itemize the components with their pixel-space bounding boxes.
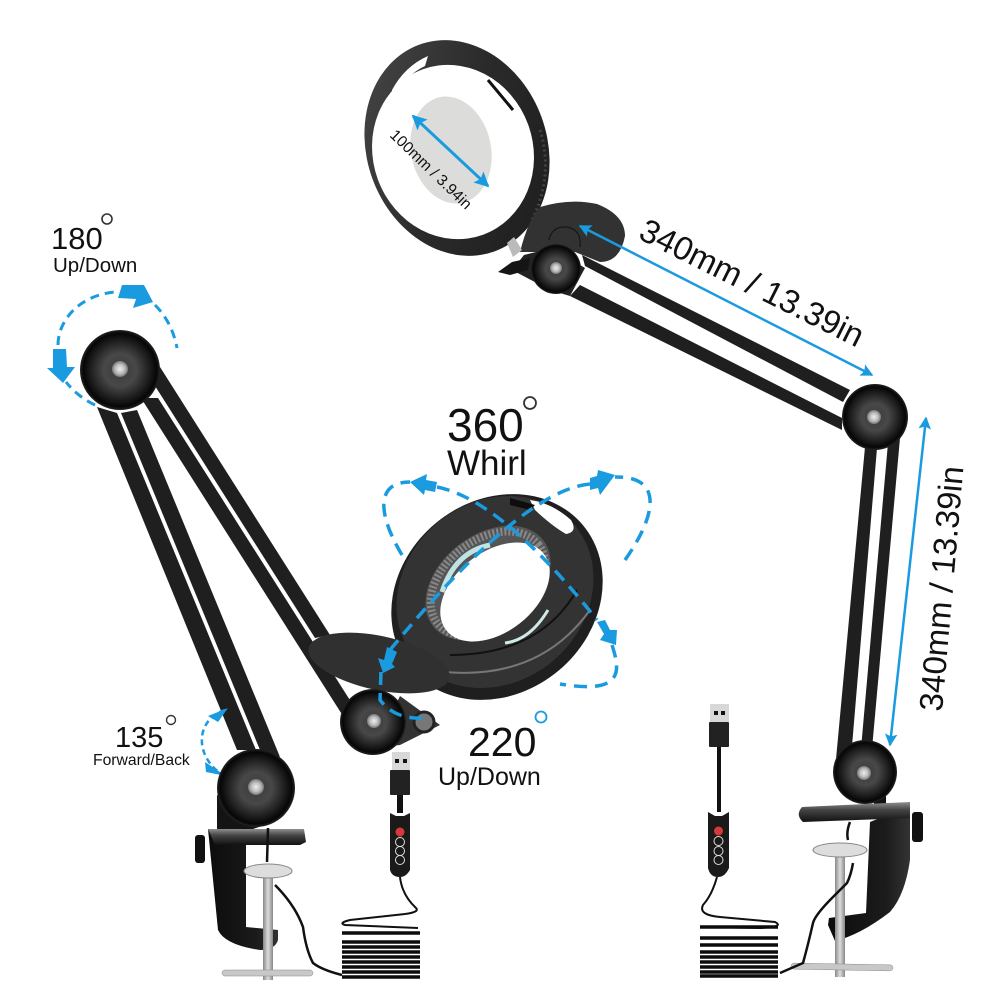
label: 220 up/down: Up/Down [438, 763, 541, 791]
right controller [708, 812, 729, 877]
joint: elbow [842, 384, 908, 450]
label: 360 whirl [447, 397, 536, 483]
center mount plate [303, 622, 455, 704]
dimension: lower arm: 340mm / 13.39in [912, 465, 970, 713]
joint: left top [80, 330, 160, 410]
rotation: 360 whirl [380, 477, 650, 718]
rotation arrowheads [378, 470, 617, 673]
right lamp arm, upper section [498, 202, 850, 430]
left lamp arm [80, 330, 360, 757]
label: 360 whirl: Whirl [447, 444, 527, 483]
dimension: lens diameter: 100mm / 3.94in [386, 127, 475, 213]
left controller [390, 813, 410, 877]
rotation: 135 degrees [93, 708, 228, 776]
joint: left base [217, 749, 295, 830]
rotation: 135 degrees: 135 [115, 722, 163, 754]
left clamp [195, 749, 342, 980]
label: 360 whirl: 360 [447, 399, 524, 451]
right clamp [780, 802, 923, 977]
left USB plug and cable [342, 752, 418, 928]
right lamp arm, lower section [833, 384, 908, 810]
rotation: 135 degrees: Forward/Back [93, 752, 190, 769]
center lens [403, 502, 573, 664]
rotation: 180 degrees: Up/Down [53, 254, 137, 277]
left coiled cable [342, 933, 420, 977]
rotation: 180 degrees [47, 214, 177, 405]
joint: top right [531, 244, 581, 294]
right coiled cable [700, 927, 778, 976]
dimension: upper arm: 340mm / 13.39in [634, 211, 870, 354]
top magnifier ring [335, 14, 579, 282]
center magnifier ring, rotated view [303, 451, 645, 743]
joint: right base [833, 740, 897, 804]
right USB plug and cable [702, 704, 778, 928]
magnifier lens [401, 89, 501, 211]
dimension: lower arm [890, 418, 970, 745]
rotation: 180 degrees: 180 [51, 221, 103, 256]
label: 220 up/down [438, 712, 546, 791]
center lamp joint [340, 689, 440, 755]
label: 220 up/down: 220 [468, 719, 536, 765]
